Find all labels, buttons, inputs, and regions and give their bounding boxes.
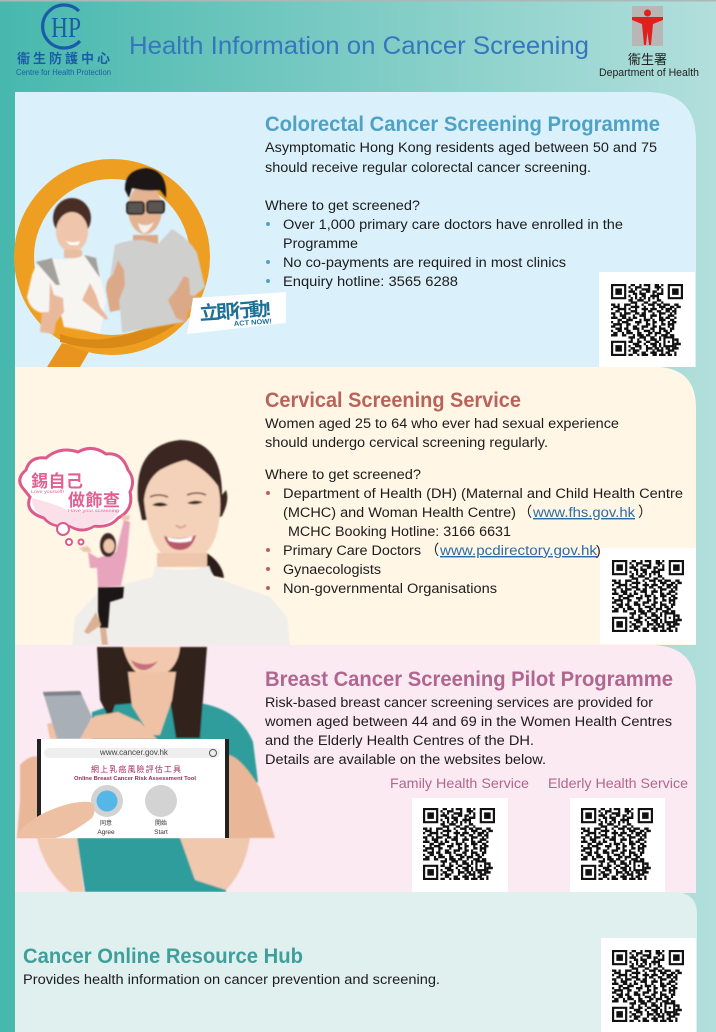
intro text: [265, 416, 619, 451]
logo: Centre for Health Protection: HP: [51, 13, 81, 44]
title: Health Information on Cancer Screening: [129, 32, 589, 60]
logo: Department of Health: [599, 6, 699, 79]
intro text: [265, 140, 657, 176]
logo: Centre for Health Protection: Centre for Health Protection: [16, 68, 111, 77]
heading: Cancer Online Resource Hub: [23, 945, 303, 968]
where to get screened list: Programme: [283, 236, 358, 252]
person: woman: [27, 198, 108, 334]
phone screen card: 同意: [100, 819, 112, 827]
where to get screened list: Gynaecologists: [283, 562, 381, 578]
header: [0, 0, 716, 79]
where to get screened list: Over 1,000 primary care doctors have enrolled in the: [283, 217, 623, 233]
phone screen card: Start: [154, 829, 168, 836]
where to get screened list: Enquiry hotline: 3565 6288: [283, 274, 458, 290]
heading: Breast Cancer Screening Pilot Programme: [265, 668, 673, 691]
where to get screened list: Primary Care Doctors: [283, 543, 421, 559]
badge: act now: ACT NOW!: [234, 318, 272, 328]
where to get screened list: [265, 198, 623, 290]
description text: Risk-based breast cancer screening services are provided for: [265, 695, 653, 711]
speech bubble: Love yourself!: [31, 489, 64, 494]
badge: act now: 立即行動!: [199, 297, 272, 325]
phone screen card: 網上乳癌風險評估工具: [91, 764, 181, 774]
panel: breast cancer screening: [15, 645, 696, 893]
speech bubble: Have your screening: [68, 508, 120, 513]
description text: and the Elderly Health Centres of the DH.: [265, 733, 534, 749]
QR code: [601, 938, 696, 1032]
illustration: magnifying glass with two people: [24, 168, 286, 367]
phone screen card: www.cancer.gov.hk: [99, 748, 169, 757]
intro text: should undergo cervical screening regularly.: [265, 435, 548, 451]
intro text: should receive regular colorectal cancer screening.: [265, 160, 591, 176]
person: small woman: [79, 515, 130, 645]
person: woman holding phone: [17, 647, 275, 892]
QR: family health service: [390, 775, 529, 893]
QR: family health service: Family Health Service: [390, 775, 529, 791]
intro text: Women aged 25 to 64 who ever had sexual experience: [265, 416, 619, 432]
where to get screened list: www.fhs.gov.hk: [532, 505, 636, 521]
where to get screened list: www.pcdirectory.gov.hk: [439, 543, 598, 559]
QR: elderly health service: Elderly Health Service: [548, 775, 688, 791]
where to get screened list: No co-payments are required in most clinics: [283, 255, 566, 271]
phone screen card: [17, 739, 229, 838]
where to get screened list: （: [518, 505, 532, 521]
where to get screened list: Department of Health (DH) (Maternal and Child Health Centre: [283, 486, 683, 502]
speech bubble: 錫自己: [31, 471, 83, 491]
logo: Centre for Health Protection: [16, 5, 111, 77]
QR code: [599, 272, 695, 367]
logo: Department of Health: 衞生署: [628, 52, 667, 67]
where to get screened list: （: [425, 543, 439, 559]
person: man: [106, 168, 205, 333]
logo: Department of Health: Department of Health: [599, 67, 699, 79]
speech bubble: [20, 448, 133, 545]
illustration: woman with phone: [17, 647, 275, 892]
logo: Centre for Health Protection: 衞生防護中心: [17, 51, 110, 66]
panel: colorectal cancer screening: [15, 92, 696, 367]
where to get screened list: Non-governmental Organisations: [283, 581, 497, 597]
where to get screened list: [265, 467, 683, 597]
speech bubble: 做飾查: [68, 490, 120, 510]
description text: women aged between 44 and 69 in the Women Health Centres: [264, 714, 672, 730]
where to get screened list: ): [596, 543, 601, 559]
heading: Colorectal Cancer Screening Programme: [265, 113, 660, 136]
person: large woman: [72, 440, 290, 647]
phone screen card: 開始: [155, 819, 167, 827]
QR code: [600, 548, 696, 644]
where to get screened list: Where to get screened?: [265, 467, 421, 483]
illustration: woman with speech bubble: [20, 440, 290, 647]
phone screen card: Agree: [97, 829, 115, 836]
where to get screened list: Where to get screened?: [265, 198, 420, 214]
badge: act now: [187, 292, 286, 334]
heading: Cervical Screening Service: [265, 389, 521, 412]
QR: elderly health service: [548, 775, 688, 893]
where to get screened list: (MCHC) and Woman Health Centre): [283, 505, 516, 521]
description text: [264, 695, 672, 768]
phone screen card: Online Breast Cancer Risk Assessment Tool: [74, 776, 196, 782]
intro text: Asymptomatic Hong Kong residents aged between 50 and 75: [265, 140, 657, 156]
where to get screened list: ）: [638, 505, 652, 521]
panel: cancer online resource hub: [15, 892, 697, 1032]
description text: Provides health information on cancer prevention and screening.: [23, 972, 440, 988]
description text: Details are available on the websites below.: [265, 752, 546, 768]
where to get screened list: MCHC Booking Hotline: 3166 6631: [288, 524, 511, 540]
panel: cervical screening: [15, 367, 696, 647]
